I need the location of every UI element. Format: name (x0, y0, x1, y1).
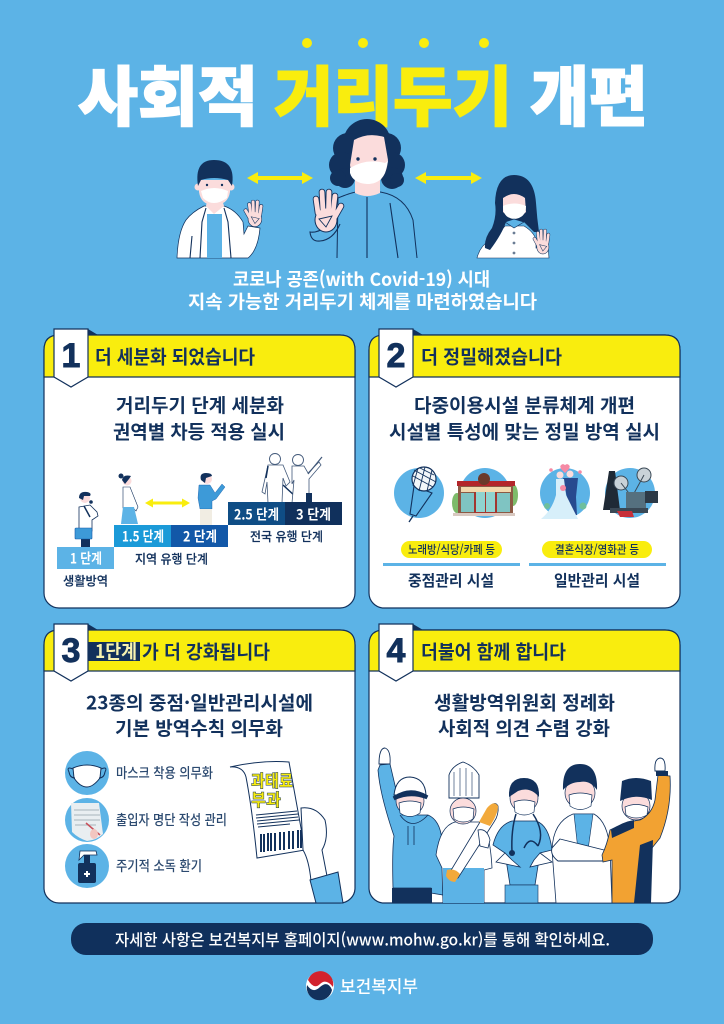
step: 2.5 단계: 2.5 단계 (234, 504, 279, 524)
step: 1 단계 (57, 547, 114, 569)
panel: 3 1단계가 더 강화됩니다 (44, 624, 355, 903)
worker: hoodie with helmet (378, 748, 443, 903)
illustration: fine notice held by hand: 부과 (251, 786, 281, 811)
subheading (434, 688, 615, 741)
figure: woman in skirt (118, 474, 138, 524)
illustration: five workers (378, 748, 670, 903)
subheading (86, 688, 313, 741)
step: 2 단계: 2 단계 (183, 526, 217, 546)
step: 3 단계: 3 단계 (296, 504, 331, 524)
icon: film projector (603, 468, 658, 518)
badge: number 2 (379, 329, 423, 387)
icon: mask (65, 751, 109, 795)
worker: chef with baguette (436, 762, 498, 903)
intro text (188, 266, 537, 314)
illustration: fine notice held by hand (230, 762, 343, 903)
step: 1.5 단계: 1.5 단계 (122, 526, 164, 546)
illustration: three people keeping distance (177, 119, 549, 258)
text: 주기적 소독 환기: 주기적 소독 환기 (116, 856, 202, 876)
text: 마스크 착용 의무화: 마스크 착용 의무화 (116, 763, 213, 783)
illustration: fine notice held by hand: 과태료 (251, 767, 293, 792)
label: 전국 유행 단계: 전국 유행 단계 (250, 526, 323, 545)
pill: 결혼식장/영화관 등: 결혼식장/영화관 등 (555, 542, 639, 558)
title: 개편 (530, 45, 648, 139)
subheading: 기본 방역수칙 의무화 (115, 714, 283, 741)
header tag: 1단계: 1단계 (95, 637, 137, 664)
title: 거리두기 (274, 45, 512, 139)
person: right woman (477, 175, 549, 258)
footer bar (71, 923, 653, 955)
badge: number 3: 3 (62, 632, 80, 670)
intro text: 코로나 공존(with Covid-19) 시대 (233, 266, 490, 292)
subheading: 생활방역위원회 정례화 (434, 688, 615, 716)
title: 사회적 (78, 45, 258, 139)
figure: man on phone (75, 492, 98, 547)
arrow: right distance (415, 172, 482, 184)
icon: clipboard (65, 798, 109, 842)
step: 1 단계: 1 단계 (70, 548, 102, 568)
subheading (113, 391, 285, 444)
header text: 더불어 함께 합니다 (421, 638, 566, 664)
intro text: 지속 가능한 거리두기 체계를 마련하였습니다 (188, 288, 537, 314)
icon: wedding couple (540, 464, 590, 519)
label: 중점관리 시설: 중점관리 시설 (408, 569, 494, 591)
label: 일반관리 시설: 일반관리 시설 (554, 569, 640, 591)
subheading: 다중이용시설 분류체계 개편 (414, 391, 635, 418)
stepped chart: distancing levels (57, 454, 342, 590)
icon: spray bottle (65, 844, 109, 888)
badge: number 3 (54, 624, 98, 681)
header text: 더 정밀해졌습니다 (421, 342, 562, 370)
figures: protective suits (262, 454, 322, 503)
arrow: distance (145, 498, 190, 508)
subheading: 거리두기 단계 세분화 (116, 391, 284, 418)
worker: nurse (493, 778, 552, 903)
subheading: 시설별 특성에 맞는 정밀 방역 실시 (389, 418, 660, 444)
icon: taegeuk emblem (306, 971, 334, 1000)
header text: 가 더 강화됩니다 (142, 638, 270, 664)
logo: 보건복지부: 보건복지부 (340, 972, 418, 998)
badge: number 4: 4 (387, 632, 406, 670)
logo: 보건복지부 (306, 971, 418, 1000)
figure: person in blue hoodie (198, 473, 225, 525)
subheading: 사회적 의견 수렴 강화 (438, 714, 610, 741)
arrow: left distance (247, 172, 313, 184)
label: 생활방역: 생활방역 (63, 570, 108, 590)
badge: number 1: 1 (62, 337, 80, 375)
panel: 2 더 정밀해졌습니다 (369, 329, 680, 608)
worker: firefighter (602, 758, 670, 903)
subheading (389, 391, 660, 444)
badge: number 2: 2 (387, 337, 405, 375)
person: left man (177, 160, 262, 258)
badge: number 4 (379, 624, 423, 681)
panel: 4 더불어 함께 합니다 (369, 624, 680, 903)
subheading: 23종의 중점·일반관리시설에 (86, 688, 313, 716)
header text: 더 세분화 되었습니다 (95, 342, 255, 370)
step: 3 단계 (285, 502, 342, 525)
icon: microphone (394, 467, 444, 522)
person: centre woman (310, 119, 417, 258)
subheading: 권역별 차등 적용 실시 (113, 418, 285, 444)
icon: cafe (452, 468, 518, 518)
text: 출입자 명단 작성 관리: 출입자 명단 작성 관리 (116, 810, 227, 830)
title (78, 38, 648, 139)
step: 2 단계 (171, 525, 228, 547)
panel: 1 더 세분화 (44, 329, 355, 608)
footer bar: 자세한 사항은 보건복지부 홈페이지(www.mohw.go.kr)를 통해 확인하세요. (115, 926, 610, 950)
pill: 노래방/식당/카페 등: 노래방/식당/카페 등 (408, 542, 495, 558)
worker: doctor (552, 764, 612, 903)
badge: number 1 (54, 329, 98, 387)
label: 지역 유행 단계: 지역 유행 단계 (135, 548, 208, 568)
